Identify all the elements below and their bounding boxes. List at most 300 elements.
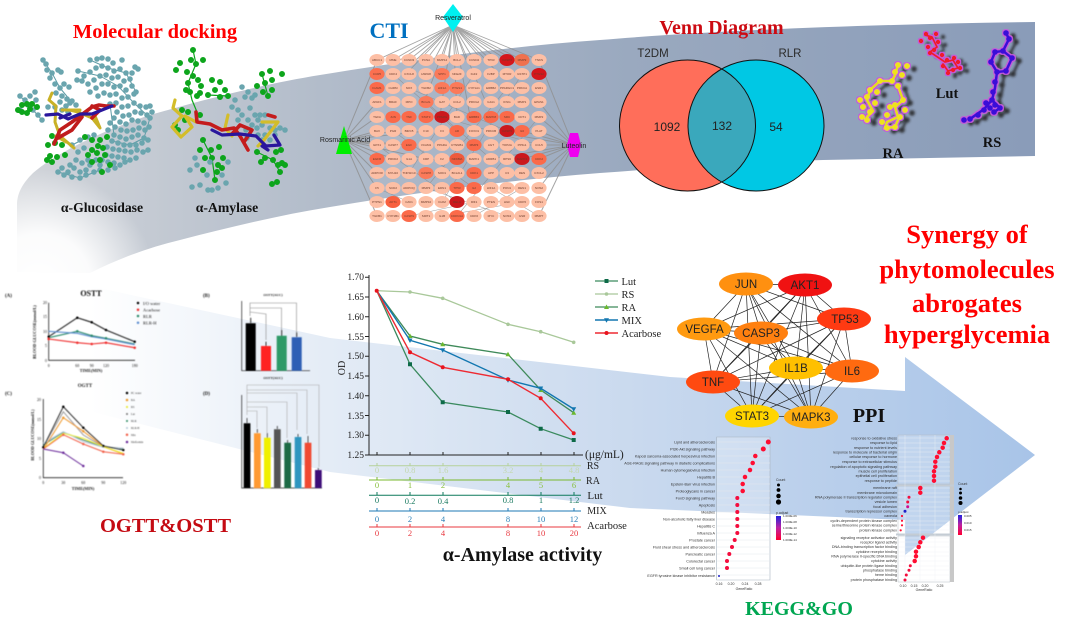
series: RA [377,291,576,415]
network gene labels: ERBB2 [486,86,496,90]
KEGG legend: 1.000E-14 [783,538,797,542]
network gene labels: MTOR [503,72,512,76]
GO plot frame [898,435,950,582]
panel: OSTT line chart (A): 5 [45,343,47,348]
GO term labels: RNA polymerase II-specific DNA binding [831,554,897,558]
panel: OGTT line chart (C): 60 [81,480,85,485]
KEGG legend: 1.000E-10 [783,526,797,530]
network gene labels: IL1A [406,157,412,161]
network gene labels: PRKG2 [469,100,479,104]
axis: Acarbose [369,521,627,538]
axes and tick labels: 1.50 [347,352,364,362]
KEGG pathway labels: Fluid shear stress and atherosclerosis [653,546,715,550]
axes and tick labels: 1.45 [347,372,364,382]
panel: OSTT line chart (A): 120 [103,363,109,368]
axis: RS: 4.8 [569,465,579,475]
network gene labels: TNKS [535,58,543,62]
panel: OGTT line chart (C) [5,384,144,491]
panel: OSTT line chart (A): 180 [132,363,138,368]
axis: Acarbose: 4 [441,528,446,538]
network gene labels: CYP1A1 [468,86,480,90]
panel: OSTT line chart (A): 10 [43,329,47,334]
network gene labels: ESR1 [535,86,543,90]
KEGG pathway labels: Small cell lung cancer [679,566,716,570]
title: CTI: CTI [369,18,409,43]
GO term labels: response to peptide [865,479,897,483]
panel: OGTT line chart (C): RS [131,406,135,409]
network gene labels: RELA [453,200,461,204]
axis: Acarbose: 20 [570,528,578,538]
network gene labels: CCL2 [453,100,461,104]
GO legend: p.adjust [958,510,969,514]
network gene labels: MAPK3 [517,157,527,161]
panel: OGTT line chart (C): BLOOD GLUCOSE(mmol/L) [30,409,35,461]
overlap region [688,69,756,182]
GO term labels: protein phosphatase binding [851,578,897,582]
title: OGTT&OSTT: OGTT&OSTT [100,515,231,537]
GO term labels: caveola [884,514,898,518]
axis: MIX: 12 [570,514,578,524]
network gene labels: CCL5 [535,143,543,147]
molecule: RS [964,33,1012,120]
panel: OGTT line chart (C): 0 [42,480,44,485]
network gene labels: PCNA [422,58,430,62]
GO term labels: signaling receptor activator activity [841,536,897,540]
KEGG pathway labels: Epstein-Barr virus infection [671,482,715,486]
axis: RS: 1.6 [438,465,448,475]
title: Venn Diagram: Venn Diagram [659,17,784,39]
network gene labels: MMP12 [437,58,447,62]
KEGG pathway labels: Human cytomegalovirus infection [661,468,715,472]
axes and tick labels: 1.40 [347,392,364,402]
legend: RS [622,290,635,301]
panel: alpha-amylase docking model [172,50,285,190]
network gene labels: ABCC1 [372,58,382,62]
network gene labels: BCL2L [421,100,431,104]
network gene labels: IFNG [503,100,511,104]
axes and tick labels: 1.65 [347,293,364,303]
axis: Lut: 0.8 [503,495,513,505]
network gene labels: F5 [375,186,379,190]
network gene labels: FOS1 [535,200,543,204]
panel: OGTT line chart (C): Mix [131,434,136,437]
GO term labels: cytokine receptor binding [856,550,897,554]
network gene labels: RPS6 [503,157,511,161]
network gene labels: IL1B [439,214,445,218]
GO term labels: membrane microdomain [857,491,897,495]
panel: OSTT line chart (A): RLR-H [143,320,157,326]
panel: OSTT AUC bar chart (B): OSTT(AUC) [263,293,283,297]
network gene labels: BAX [374,129,380,133]
panel: OGTT line chart (C): TIME(MIN) [72,486,95,491]
network gene labels: REN1 [518,186,526,190]
axis: RS: RS [587,461,599,472]
KEGG pathway labels: Non-alcoholic fatty liver disease [663,518,715,522]
GO term labels: protein kinase complex [859,528,897,532]
axes and tick labels: 1.30 [347,431,364,441]
network gene labels: MME [390,58,396,62]
network gene labels: MYC [488,214,495,218]
legend: Lut [622,277,636,288]
legend [595,277,661,340]
KEGG pathway labels: Measles [701,510,715,514]
GO axis: 0.10 [900,584,906,588]
GO term labels: cytokine activity [871,559,897,563]
network gene labels: GJA1 [487,100,495,104]
network gene labels: PTGS1 [452,86,462,90]
GO term labels: heme binding [875,573,897,577]
network gene labels: AKT1 [389,200,397,204]
panel: OGTT AUC bar chart (D): (D) [203,392,210,397]
GO legend: 0.015 [964,528,972,532]
panel: OGTT line chart (C): 30 [61,480,65,485]
GO term labels: phosphatase binding [863,568,897,572]
panel: OSTT line chart (A): BLOOD GLUCOSE(mmol/L) [32,305,37,359]
KEGG pathway labels: Pancreatic cancer [685,552,716,556]
panel: OSTT AUC bar chart (B) [203,293,310,380]
axis: Acarbose: 10 [537,528,545,538]
KEGG pathway labels: AGE-RAGE signaling pathway in diabetic complications [624,462,715,466]
panel: OSTT line chart (A): TIME(MIN) [80,368,103,373]
network gene labels: SIRT1 [422,214,431,218]
KEGG pathway labels: Proteoglycans in cancer [676,490,716,494]
PPI node: IL1B [769,356,823,380]
axis: Acarbose: 0 [375,528,379,538]
network gene labels: CASP3 [502,129,512,133]
KEGG axis [716,582,761,591]
network gene labels: HIF1A [438,86,446,90]
network gene labels: CAV1 [405,200,413,204]
axis: RA: 4 [506,480,511,490]
network gene labels: BIRC5 [405,129,414,133]
label: alpha-Amylase: α-Amylase [196,200,258,215]
molecule: RA [860,65,907,128]
panel: OSTT AUC bar chart (B): (B) [203,294,210,299]
axis: Lut [369,490,603,506]
network gene labels: TP63 [487,58,495,62]
network gene labels: MMP10 [421,200,431,204]
KEGG pathway labels: Prostate cancer [689,538,716,542]
network gene labels: F2BP [487,72,495,76]
network gene labels: GAT [439,100,445,104]
panel: OGTT line chart (C): Lut [131,413,135,416]
panel: OGTT line chart (C): (C) [5,392,12,397]
PPI edges [704,284,852,417]
network gene labels: TGFB1 [372,214,382,218]
GO axis: GeneRatio [916,588,932,592]
axis: MIX: MIX [587,506,607,517]
series: RS [377,291,574,342]
network gene labels: IL2 [472,186,476,190]
GO axis: 0.20 [922,584,928,588]
node: Rosmarinic Acid: Rosmarinic Acid [320,137,370,144]
PPI node: IL6 [825,360,879,382]
network gene labels: JUN [390,115,396,119]
network gene labels: PTEN [487,200,495,204]
PPI node: TP53 [817,308,871,330]
network gene labels: PPARG [437,115,448,119]
network gene labels: CCND3 [404,58,414,62]
network gene labels: CDK5 [518,200,526,204]
KEGG pathway labels: Lipid and atherosclerosis [674,440,715,444]
panel: OGTT line chart (C): 120 [120,480,126,485]
network gene labels: CDK1 [470,171,478,175]
KEGG axis: 0.24 [742,582,748,586]
network gene labels: ADRB1 [486,157,496,161]
node: Rosmarinic Acid [320,126,370,154]
network gene labels: BCL2 [453,58,461,62]
background: upper grey swoosh [0,22,1035,400]
network gene labels: CCR5 [373,72,381,76]
network gene labels: APP [488,171,494,175]
axis: RS: 0 [375,465,379,475]
GO axis [900,584,943,592]
axes and tick labels: (μg/mL) [585,449,624,461]
PPI node: JUN: JUN [735,279,757,291]
GO term labels: focal adhesion [873,505,897,509]
label: alpha-Glucosidase: α-Glucosidase [61,200,143,215]
label: RS: RS [983,135,1001,151]
KEGG axis: GeneRatio [736,587,752,591]
axis: Acarbose: 2 [408,528,412,538]
network gene labels: CASP4 [502,58,512,62]
network gene labels: CDK4 [389,72,397,76]
chart title: OGTT: OGTT [78,384,93,389]
network gene labels: BRAF [389,100,397,104]
axis: MIX: 0 [375,514,379,524]
network gene labels: NFKBIA [452,157,462,161]
panel: OSTT AUC bar chart (B): OSTT(AUC) [263,376,283,380]
axis: RA [369,476,601,490]
network gene labels: MMP3 [470,143,479,147]
network gene labels: CCND2 [469,58,479,62]
axes and tick labels [337,273,624,461]
GO term labels: epithelial cell proliferation [856,474,897,478]
network gene labels: NOX [406,86,412,90]
axis: RS: 0.8 [405,465,415,475]
network gene labels: EGF [406,143,412,147]
network gene labels [371,58,544,218]
GO term labels: response to lipid [870,441,897,445]
network gene labels: NOS3 [503,214,511,218]
network gene labels: CDK6 [470,214,478,218]
PPI node: TP53: TP53 [831,314,859,326]
value: 1092: 1092 [654,120,681,134]
GO term labels: response to nutrient levels [854,446,897,450]
set label: T2DM: T2DM [637,48,669,60]
network gene labels: HGF [504,200,510,204]
network gene labels: AGT [488,143,494,147]
axis: MIX: 2 [408,514,412,524]
network gene labels: CYP1B1 [387,214,399,218]
GO term labels: cellular response to hormone [849,455,897,459]
network gene labels: MAPK1 [469,157,479,161]
network gene labels: TNFSF10 [402,171,416,175]
GO term labels: transcription repressor complex [846,510,897,514]
axis: Lut: 0.2 [405,496,415,506]
GO term labels: ubiquitin-like protein ligase binding [841,564,897,568]
GO term labels: cyclin-dependent protein kinase complex [830,519,897,523]
network gene labels: HSPA8 [421,72,431,76]
GO term labels: DNA-binding transcription factor binding [832,545,897,549]
axis: Lut: 0.4 [438,496,449,506]
value: 54: 54 [769,120,783,134]
GO axis: 0.15 [911,584,917,588]
PPI node: CASP3 [734,322,788,344]
axis: MIX: 4 [441,514,446,524]
KEGG pathway labels: Hepatitis B [697,476,716,480]
network gene labels: BAD [454,115,461,119]
network gene labels: TGFB2 [421,86,431,90]
network gene labels: SOD1 [438,171,446,175]
network gene labels: SRC [504,115,511,119]
axes and tick labels: 1.35 [347,412,364,422]
network gene labels: MYH10 [388,171,398,175]
network gene labels: REN [519,171,525,175]
label: Lut: Lut [936,86,958,102]
series: MIX [377,291,576,412]
network gene labels: PPIG1 [518,143,527,147]
GO term labels: response to molecule of bacterial origin [833,450,897,454]
panel: OGTT line chart (C): RLR-H [131,427,139,430]
network gene labels: MMP3 [422,186,431,190]
network gene labels: IRF1 [471,200,478,204]
chart: PPI network [677,272,879,428]
axis: RA: 5 [539,480,543,490]
heading: Synergy of phytomolecules abrogates hyperglycemia: abrogates [912,288,1022,318]
PPI node: IL6: IL6 [844,366,860,378]
KEGG legend: p.adjust [776,511,788,515]
panel: OGTT line chart (C): Metformin [131,441,144,444]
network gene labels: F10 [423,129,429,133]
GO term labels: RNA polymerase II transcription regulator complex [815,496,897,500]
panel: OGTT AUC bar chart (D) [203,385,322,488]
KEGG dots [763,442,768,449]
panel: OSTT line chart (A): 20 [43,300,47,305]
axes and tick labels: 1.70 [347,273,364,283]
title: PPI: PPI [853,405,885,427]
network gene labels: SPP1 [438,72,446,76]
KEGG pathway labels: Apoptosis [699,504,715,508]
panel: OGTT line chart (C): 20 [37,397,41,402]
axis: RS [369,461,599,475]
KEGG axis: 0.20 [728,582,734,586]
axis: RA: 2 [441,480,445,490]
GO legend: Count [958,482,967,486]
PPI node: IL1B: IL1B [784,363,808,375]
GO term labels [815,436,898,582]
panel: OSTT line chart (A): I/O water [143,301,161,306]
KEGG legend: 1.000E-06 [783,514,797,518]
axis: RS: 3.2 [503,465,513,475]
node: Luteolin [562,133,586,157]
GO axis: 0.25 [937,584,943,588]
PPI node: TNF [686,370,740,394]
network gene labels: PTPN1 [372,200,382,204]
network gene labels: CRP [423,157,429,161]
legend: MIX [622,316,642,327]
network gene labels: MPO [406,100,413,104]
title: alpha-Amylase activity: α-Amylase activity [443,544,602,566]
GO term labels: response to oxidative stress [851,436,897,440]
GO term labels: muscle cell proliferation [858,470,897,474]
circle: RLR [688,60,824,191]
heading: Synergy of phytomolecules abrogates hyperglycemia: phytomolecules [879,254,1055,284]
network gene labels: TGFA [373,115,381,119]
network gene labels: F2 [440,157,444,161]
network gene labels: CASP9 [404,214,414,218]
network gene labels: CASP8 [421,171,431,175]
PPI node: MAPK3 [784,406,838,428]
background: lower blue arrow [85,285,1035,555]
axes and tick labels: OD [337,361,348,375]
panel: OGTT line chart (C): 5 [39,456,41,461]
axis: RS: 4 [539,465,544,475]
network gene labels: FOXO1 [469,129,479,133]
network gene labels: ERBB3 [469,115,479,119]
network gene labels: MMP7 [535,214,544,218]
set label: RLR: RLR [778,48,802,60]
KEGG axis: 0.16 [716,582,722,586]
network gene labels: CHRM [388,86,398,90]
PPI node: AKT1: AKT1 [791,280,819,292]
network gene labels: C3 [505,171,509,175]
KEGG legend: Count [776,478,785,482]
network nodes [369,54,547,222]
node: Resveratrol: Resveratrol [435,15,471,22]
KEGG pathway labels [624,440,716,578]
heading: Synergy of phytomolecules abrogates hyperglycemia [879,219,1055,349]
panel: OSTT line chart (A): Acarbose [143,308,160,312]
chart title: OSTT: OSTT [80,289,102,298]
PPI node: STAT3 [725,404,779,428]
network gene labels: SCD2 [389,186,397,190]
network gene labels: TOP2A [502,143,512,147]
network gene labels: BCL2L1 [452,171,463,175]
axis: Lut: 1 [539,495,543,505]
GO term labels: membrane raft [873,486,897,490]
network gene labels: CXCL8 [404,72,414,76]
KEGG pathway labels: Influenza A [697,532,716,536]
axis: Acarbose: 8 [506,528,510,538]
network gene labels: GPX1 [373,143,381,147]
heading: Synergy of phytomolecules abrogates hyperglycemia: Synergy of [906,219,1029,249]
network gene labels: PPARGC1 [500,86,514,90]
panel: OSTT line chart (A): 90 [90,363,94,368]
axis: Lut: 0 [375,495,379,505]
KEGG pathway labels: EGFR tyrosine kinase inhibitor resistance [647,574,715,578]
network gene labels: MMP1 [518,100,527,104]
panel: OSTT line chart (A): 60 [75,363,79,368]
PPI node: STAT3: STAT3 [735,411,769,423]
network gene labels: PPARA [437,143,447,147]
value: 132: 132 [712,119,732,133]
PPI node: TNF: TNF [702,377,724,389]
network gene labels: ADIPOR [371,171,384,175]
panel: OSTT line chart (A): 15 [43,314,47,319]
chart: GO dot plot [815,435,972,592]
PPI node: CASP3: CASP3 [742,328,780,340]
network gene labels: EDN1 [438,186,446,190]
panel: OGTT line chart (C): 10 [37,436,41,441]
network gene labels: PON1 [503,186,511,190]
KEGG pathway labels: Kaposi sarcoma-associated herpesvirus infection [635,454,715,458]
network gene labels: IL6 [520,129,524,133]
axis: RA: 0 [375,480,379,490]
network gene labels: EPAS1 [534,100,544,104]
network gene labels: CDKN1A [451,214,463,218]
GO legend: 0.005 [964,514,972,518]
